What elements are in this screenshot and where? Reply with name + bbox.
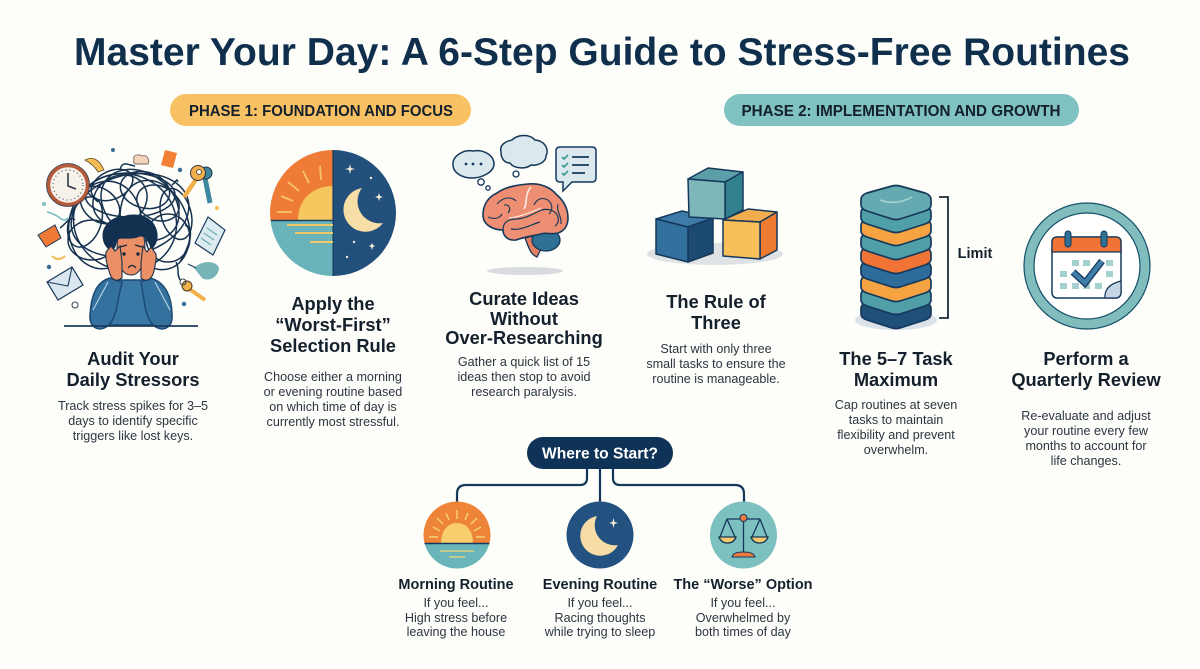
step 2 description: Choose either a morning <box>264 370 402 384</box>
step 5 description: Cap routines at seven <box>835 398 957 412</box>
step 5 heading: Maximum <box>854 369 938 390</box>
evening description: Racing thoughts <box>554 611 646 625</box>
phase 2 banner: PHASE 2: IMPLEMENTATION AND GROWTH <box>742 103 1060 120</box>
where to start pill: Where to Start? <box>542 446 658 462</box>
step 3 heading: Curate Ideas <box>469 288 579 309</box>
icon: sun and moon circle <box>270 150 396 276</box>
phase 2 banner <box>724 94 1079 126</box>
step 2 heading: Apply the <box>291 293 375 314</box>
note sheet <box>195 217 225 255</box>
morning description: High stress before <box>405 611 507 625</box>
limit label: Limit <box>958 246 992 262</box>
clock <box>46 164 90 206</box>
hands <box>106 246 122 280</box>
phase 1 banner <box>170 94 471 126</box>
morning heading: Morning Routine <box>398 577 514 593</box>
step 4: rule of three <box>646 168 786 386</box>
orange squares <box>38 225 61 247</box>
step 1 description: triggers like lost keys. <box>73 429 193 443</box>
option: worse option <box>673 502 813 639</box>
icon: sunrise <box>424 501 490 568</box>
thought bubble: empty <box>501 136 547 177</box>
thought bubble: dots <box>453 151 494 190</box>
step 6 description: months to account for <box>1025 439 1147 453</box>
step 2 heading: Selection Rule <box>270 335 396 356</box>
envelope <box>47 267 83 300</box>
table line <box>64 325 198 327</box>
step 4 heading: Three <box>691 312 741 333</box>
step 3 heading: Over-Researching <box>445 327 603 348</box>
key large <box>184 166 212 203</box>
evening heading: Evening Routine <box>543 577 657 593</box>
step 2 description: on which time of day is <box>269 400 397 414</box>
step 2 heading: “Worst-First” <box>275 314 391 335</box>
icon: calendar in ring <box>1024 203 1150 329</box>
option: morning routine <box>398 501 514 639</box>
step 3 description: Gather a quick list of 15 <box>458 355 590 369</box>
icon: brain with thought bubbles <box>453 136 596 275</box>
person body <box>90 278 172 329</box>
neck and face <box>117 236 145 275</box>
step 2: worst-first <box>264 150 402 429</box>
step 1 heading: Daily Stressors <box>66 369 200 390</box>
step 1 heading: Audit Your <box>87 348 179 369</box>
morning description: If you feel... <box>423 596 489 610</box>
step 4 description: small tasks to ensure the <box>646 357 786 371</box>
evening description: If you feel... <box>567 596 633 610</box>
step 2 description: currently most stressful. <box>267 415 399 429</box>
worse option heading: The “Worse” Option <box>673 577 813 593</box>
step 1: audit stressors <box>38 148 225 443</box>
step 6 description: Re-evaluate and adjust <box>1021 409 1151 423</box>
title: Master Your Day: A 6-Step Guide to Stress-Free Routines <box>74 31 1130 74</box>
worse option description: Overwhelmed by <box>696 611 791 625</box>
step 5 description: overwhelm. <box>864 443 928 457</box>
step 5 description: tasks to maintain <box>849 413 943 427</box>
icon: balance scale <box>710 502 777 568</box>
option: evening routine <box>543 502 657 639</box>
limit bracket <box>939 197 948 318</box>
step 6 heading: Perform a <box>1043 348 1129 369</box>
step 6 description: life changes. <box>1051 454 1121 468</box>
icon: moon <box>566 502 634 568</box>
small scattered doodles <box>85 158 104 172</box>
step 6 heading: Quarterly Review <box>1011 369 1161 390</box>
checklist bubble <box>556 147 596 191</box>
step 6 description: your routine every few <box>1024 424 1149 438</box>
phase 1 banner: PHASE 1: FOUNDATION AND FOCUS <box>189 103 453 120</box>
step 3 heading: Without <box>490 308 558 329</box>
step 5 heading: The 5–7 Task <box>839 348 954 369</box>
evening description: while trying to sleep <box>544 625 655 639</box>
step 4 description: Start with only three <box>660 342 772 356</box>
decision tree connectors <box>457 469 744 503</box>
step 6: quarterly review <box>1011 203 1161 468</box>
step 1 description: Track stress spikes for 3–5 <box>58 399 208 413</box>
step 3: curate ideas <box>445 136 603 399</box>
step 3 description: research paralysis. <box>471 385 577 399</box>
step 4 heading: The Rule of <box>666 291 767 312</box>
where to start pill <box>527 437 673 469</box>
key small <box>180 279 205 300</box>
icon: three cubes <box>647 168 783 265</box>
step 3 description: ideas then stop to avoid <box>457 370 591 384</box>
step 2 description: or evening routine based <box>264 385 402 399</box>
step 1 description: days to identify specific <box>68 414 198 428</box>
worse option description: If you feel... <box>710 596 776 610</box>
step 5 description: flexibility and prevent <box>837 428 955 442</box>
icon: stack of layers <box>855 186 937 330</box>
hair <box>103 214 158 251</box>
morning description: leaving the house <box>407 625 505 639</box>
step 5: task maximum <box>835 186 992 457</box>
worse option description: both times of day <box>695 625 792 639</box>
icon: stressed person with scribble <box>38 148 225 329</box>
step 4 description: routine is manageable. <box>652 372 780 386</box>
